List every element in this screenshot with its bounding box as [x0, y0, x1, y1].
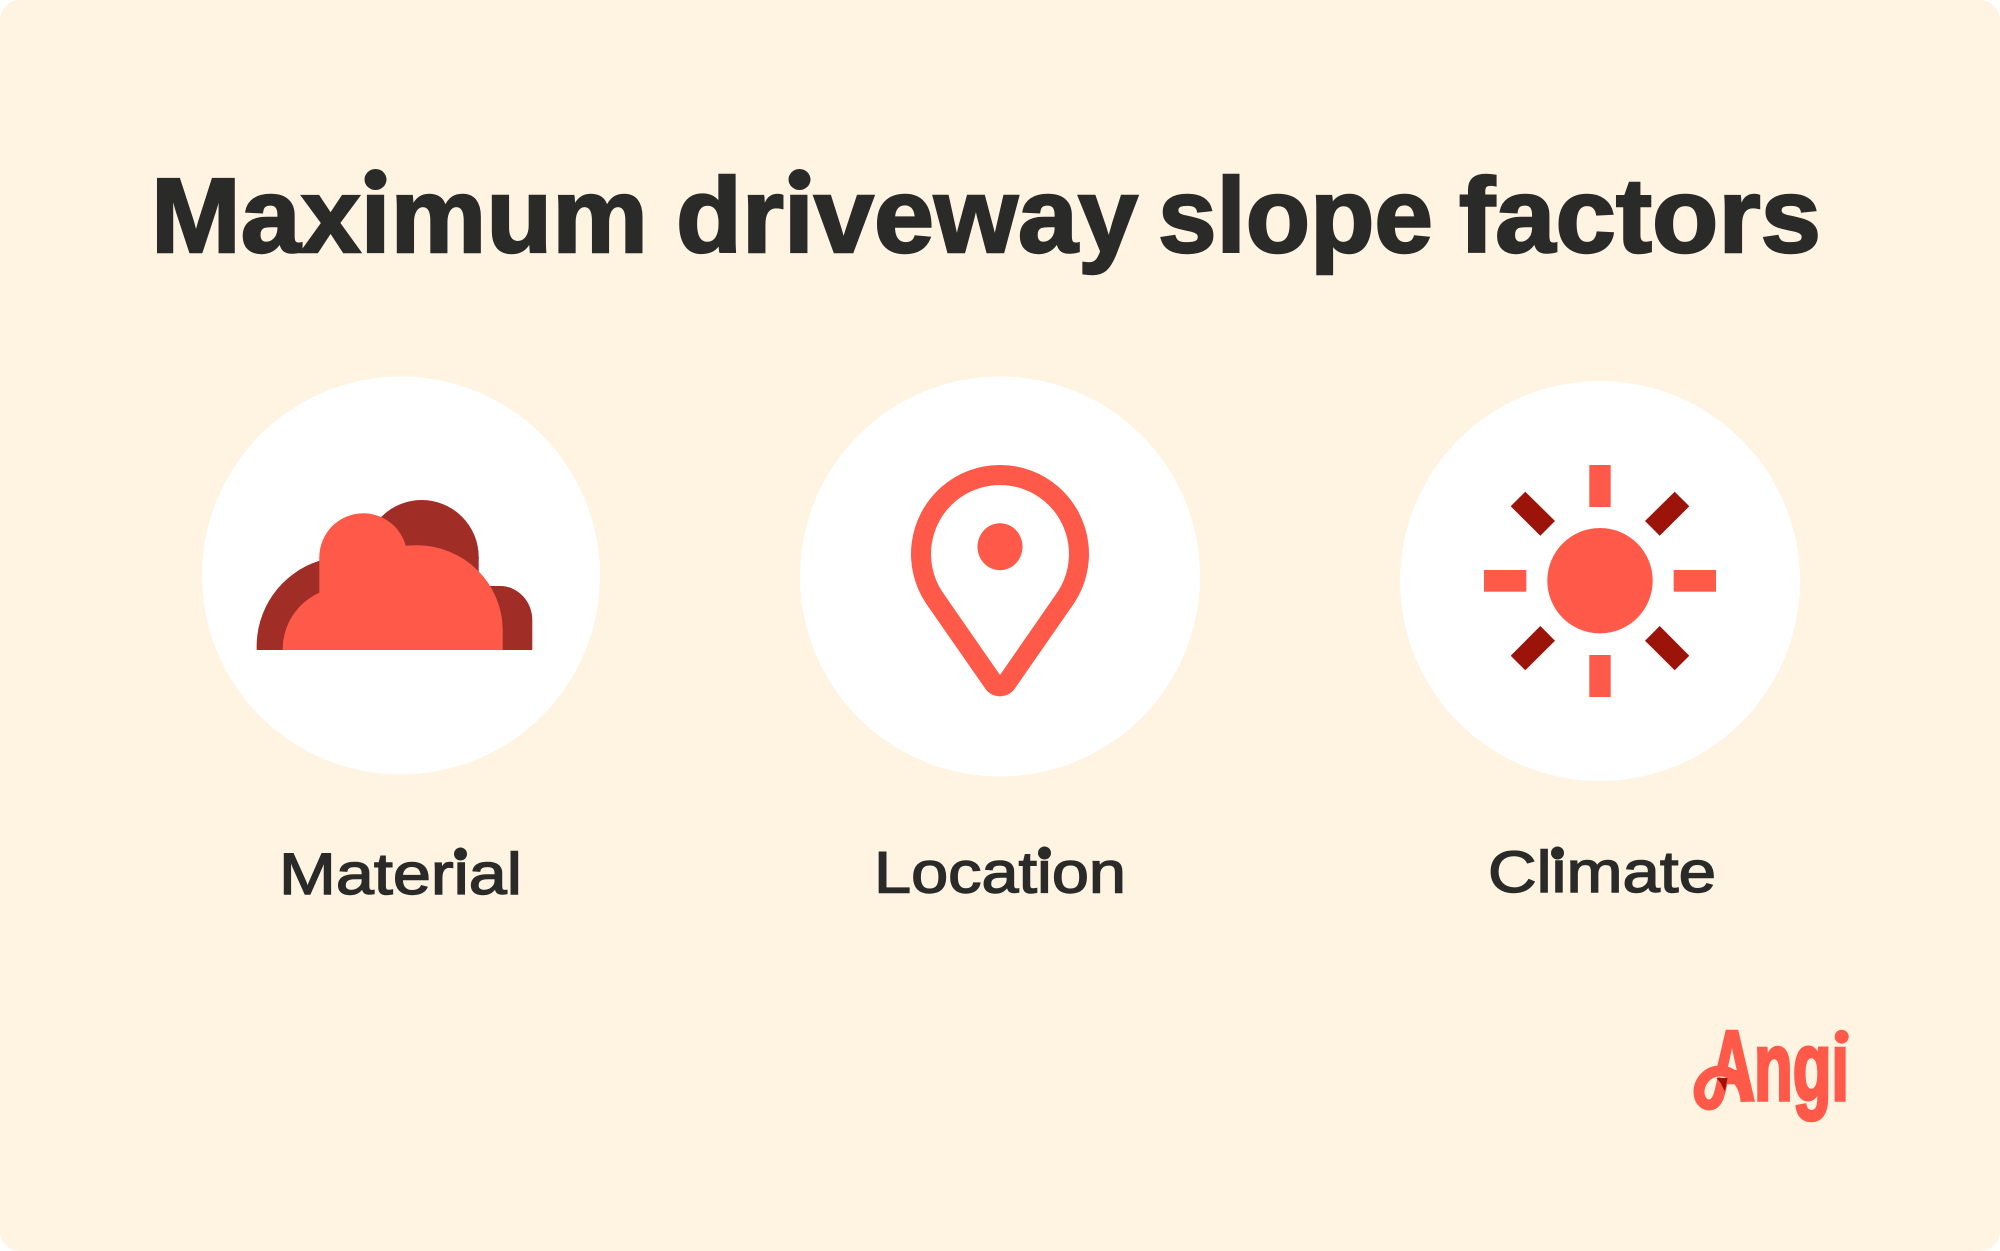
logo: Angi: A — [1709, 1010, 1755, 1121]
label: location: Location — [874, 841, 1126, 906]
title: Maximum — [151, 157, 648, 275]
title: driveway — [676, 157, 1138, 275]
icon: map pin — [911, 465, 1089, 696]
label: material: Material — [279, 842, 522, 907]
logo: Angi: ngi — [1754, 1012, 1849, 1121]
panel: location — [800, 376, 1200, 906]
label: climate: Climate — [1488, 840, 1716, 905]
climate circle — [1400, 381, 1800, 781]
location circle — [800, 376, 1200, 776]
material circle — [202, 376, 600, 774]
title: factors — [1459, 157, 1821, 275]
panel: material — [202, 376, 600, 907]
title — [151, 157, 1821, 275]
icon: sun — [1484, 465, 1716, 697]
panel: climate — [1400, 381, 1800, 905]
title: slope — [1158, 157, 1433, 275]
logo: Angi — [1694, 1030, 1849, 1122]
icon: material pile — [257, 500, 532, 650]
